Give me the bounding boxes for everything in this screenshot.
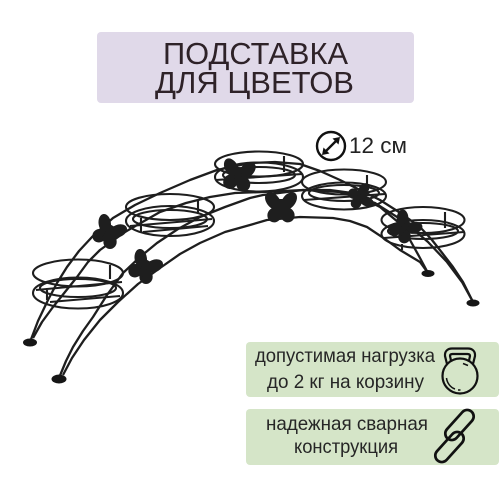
load capacity panel [246,342,499,397]
construction text: надежная сварная [266,413,428,435]
basket 2 [126,194,214,236]
basket 4 [302,170,386,210]
load capacity text [255,345,435,393]
basket 5 [382,207,464,250]
construction text: конструкция [294,436,398,458]
title text: ПОДСТАВКА [163,36,348,71]
diameter label: 12 см [349,133,407,158]
title text: ДЛЯ ЦВЕТОВ [155,65,354,100]
title text [155,36,354,100]
load capacity text: допустимая нагрузка [255,345,435,367]
icon: kettlebell [442,348,478,394]
diameter label [317,132,407,160]
load capacity text: до 2 кг на корзину [267,371,424,393]
plant stand arch [30,152,473,378]
butterflies [84,154,428,291]
basket 3 [215,152,303,192]
icon: chain links [433,407,476,465]
construction text [266,413,428,458]
feet [23,270,480,384]
basket 1 [33,260,123,308]
title panel [97,32,414,103]
welded construction panel [246,407,499,465]
arch rails [30,162,473,378]
